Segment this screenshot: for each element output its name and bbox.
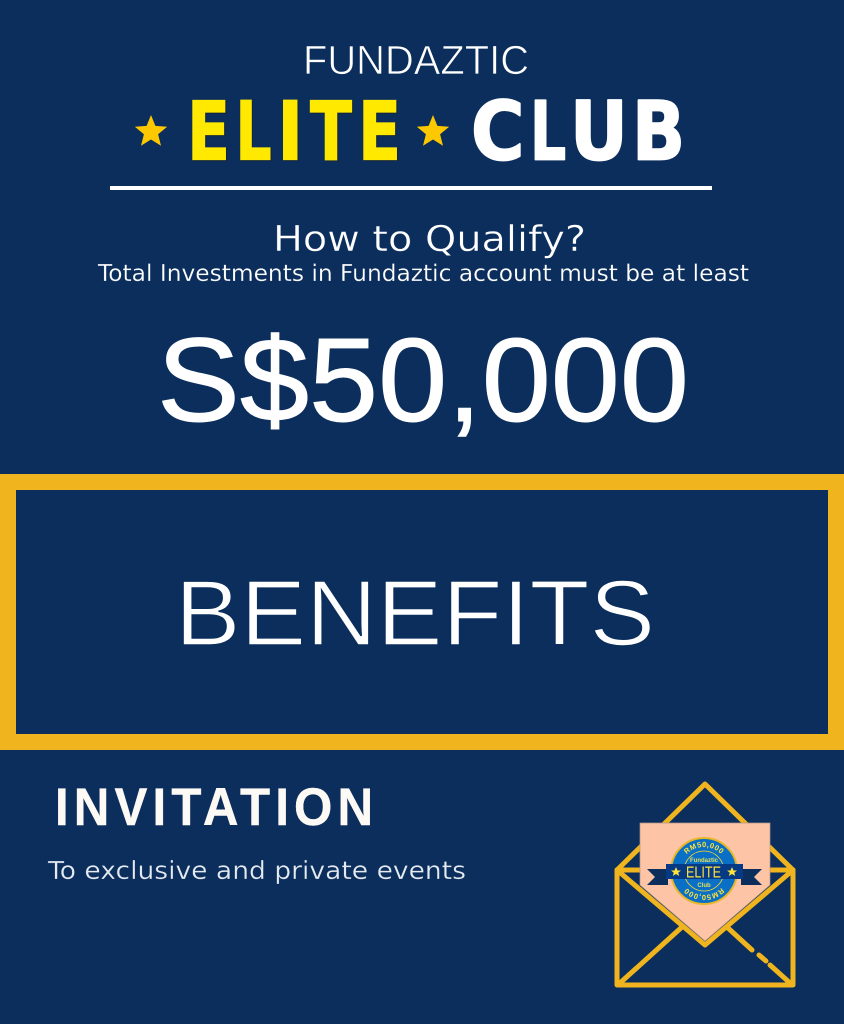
word: Elite: E — [187, 86, 230, 180]
word: Elite: L — [236, 85, 272, 179]
heading: Elite Club — [135, 84, 685, 180]
word: Elite: T — [310, 84, 352, 179]
word: Elite: E — [358, 86, 401, 180]
text: qualification requirement: Total Investments in Fundaztic account must be at least — [97, 261, 749, 287]
heading: benefits: BENEFITS — [175, 561, 655, 665]
badge: Fundaztic — [690, 858, 719, 864]
icon: left star — [135, 115, 167, 146]
badge: RM50,000 — [684, 842, 724, 854]
title: Fundaztic: FUNDAZTIC — [303, 37, 529, 83]
word: Elite: I — [277, 84, 304, 179]
badge — [647, 837, 762, 905]
word: Club — [471, 84, 685, 179]
amount: S$50,000: S$50,000 — [157, 314, 689, 447]
word: Club: C — [471, 85, 524, 179]
section heading: invitation: INVITATION — [55, 777, 373, 836]
panel: benefits — [8, 482, 836, 742]
text: invitation description: To exclusive and private events — [47, 856, 466, 885]
subheading: how to qualify: How to Qualify? — [273, 219, 586, 260]
icon: right star — [417, 115, 449, 146]
badge: ELITE — [686, 864, 721, 882]
word: Club: L — [530, 85, 566, 179]
envelope outline — [617, 784, 793, 985]
word: Club: B — [632, 84, 685, 179]
word: Elite — [187, 84, 401, 180]
icon: envelope with badge — [614, 782, 796, 988]
badge: Club — [697, 883, 711, 889]
letter paper — [640, 823, 770, 941]
word: Club: U — [570, 84, 628, 179]
badge: RM50,000 — [684, 888, 724, 900]
